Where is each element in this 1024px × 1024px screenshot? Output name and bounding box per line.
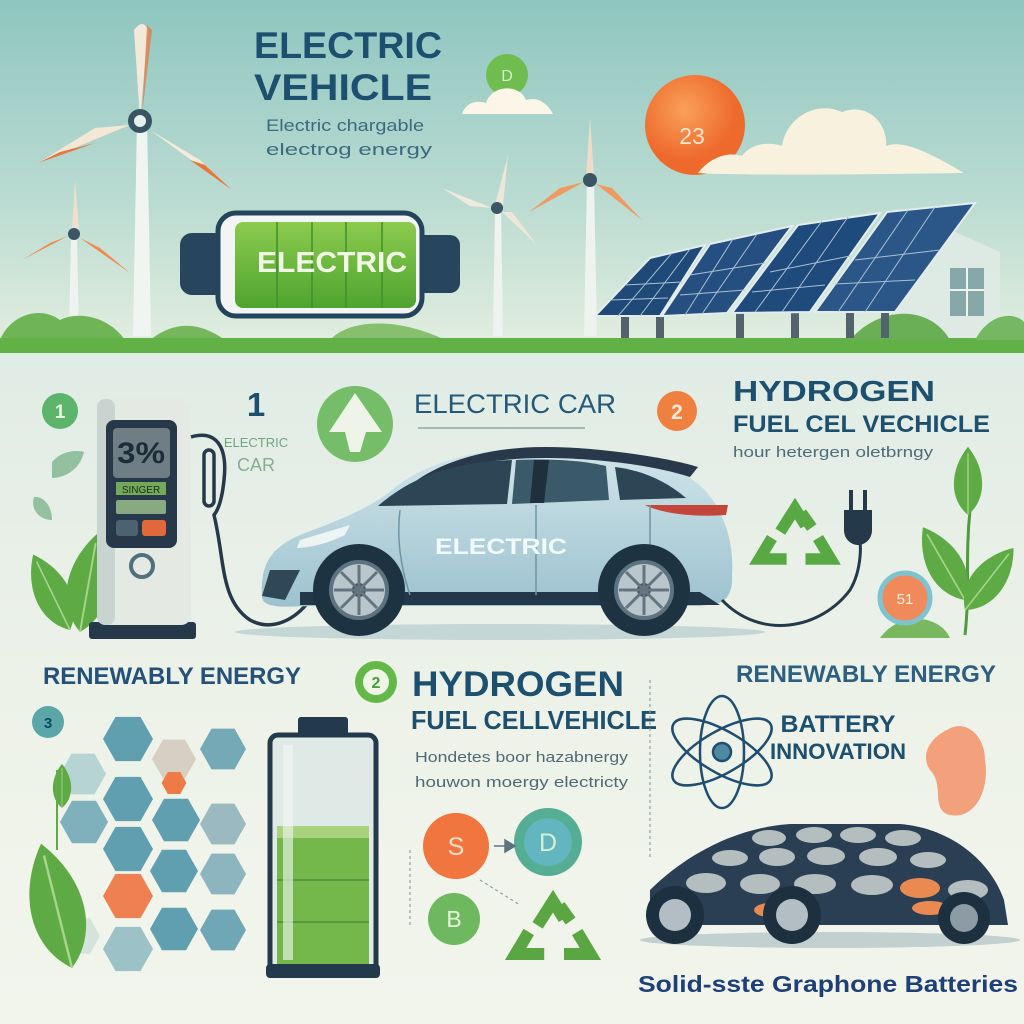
heading: hydrogen fuel cell lower: HYDROGEN <box>412 665 624 704</box>
circle D: D <box>539 829 557 857</box>
subtitle: electrog energy <box>266 140 433 159</box>
icon: atom <box>663 696 781 808</box>
icon: recycling leaf badge <box>317 386 393 462</box>
plug and cable <box>722 490 872 625</box>
icon: small leaves left <box>33 451 84 520</box>
caption: solid-state graphene batteries: Solid-sste Graphone Batteries <box>638 971 1018 997</box>
gauge badge: 51 <box>897 591 913 608</box>
heading: battery innovation: BATTERY <box>780 711 896 738</box>
subtitle: Electric chargable <box>266 116 424 135</box>
icon: sun with cloud <box>645 75 964 175</box>
solar panels <box>595 203 975 338</box>
wind turbines <box>22 24 642 336</box>
subtitle <box>266 116 433 159</box>
hydrogen lower caption <box>415 749 629 791</box>
charging station <box>89 399 196 639</box>
icon: left leaves lower <box>15 764 98 974</box>
electric car <box>235 447 765 640</box>
heading: hydrogen fuel cell lower: FUEL CELLVEHICLE <box>411 705 657 735</box>
title: VEHICLE <box>254 67 432 108</box>
circle S <box>423 813 489 879</box>
title: ELECTRIC <box>254 25 442 66</box>
lower background panel <box>0 352 1024 1024</box>
honeycomb cells <box>60 717 246 971</box>
turbine left small <box>22 180 130 336</box>
step 2 badge lower: 2 <box>372 675 381 692</box>
step 1 badge: 1 <box>55 402 66 423</box>
heading: battery innovation: INNOVATION <box>770 739 906 764</box>
battery label: ELECTRIC <box>257 247 407 279</box>
hydrogen lower caption: houwon moergy electricty <box>415 774 629 791</box>
heading: 1 electric car: CAR <box>237 455 275 475</box>
sky background panel <box>0 0 1024 345</box>
circle B <box>428 893 480 945</box>
charging station: SINGER <box>122 485 160 496</box>
heading: battery innovation <box>770 711 906 764</box>
turbine large <box>38 24 232 336</box>
hydrogen lower caption: Hondetes boor hazabnergy <box>415 749 629 766</box>
icon: recycle lower <box>516 901 590 954</box>
heading: hydrogen fuel cell <box>733 376 990 438</box>
icon: orange blob <box>926 726 986 816</box>
heading: hydrogen fuel cell: FUEL CEL VECHICLE <box>733 411 990 438</box>
heading: 1 electric car: ELECTRIC <box>224 435 288 450</box>
step 3 badge <box>32 706 64 738</box>
charging cable and nozzle <box>191 435 310 625</box>
heading: renewably energy right: RENEWABLY ENERGY <box>736 661 996 688</box>
icon: sun with cloud: 23 <box>679 123 705 149</box>
icon: large leaves left <box>18 530 118 638</box>
ground strip <box>0 313 1024 353</box>
heading: hydrogen fuel cell lower <box>411 665 657 735</box>
step 1 badge <box>42 393 78 429</box>
step 2 badge <box>657 391 697 431</box>
circle B: B <box>446 906 462 932</box>
step 2 badge: 2 <box>671 401 683 424</box>
heading: 1 electric car <box>224 386 288 475</box>
step 3 badge: 3 <box>44 715 52 732</box>
charging station: 3% <box>117 437 165 470</box>
battery pack car <box>640 824 1020 948</box>
battery: electric <box>180 213 460 316</box>
heading: 1 electric car: 1 <box>247 386 265 423</box>
heading: hydrogen fuel cell: HYDROGEN <box>733 376 935 408</box>
turbine middle <box>442 155 536 336</box>
title <box>254 25 442 108</box>
icon: right plant <box>880 447 1024 638</box>
icon: green circle with cloud: D <box>501 68 513 85</box>
connector line <box>410 680 650 925</box>
icon: recycle symbol <box>759 509 831 559</box>
car label: ELECTRIC <box>435 534 567 559</box>
circle S: S <box>448 833 464 861</box>
house <box>850 225 1024 340</box>
step 2 badge lower <box>355 661 397 703</box>
icon: green circle with cloud <box>462 54 553 114</box>
gauge badge <box>880 573 930 623</box>
heading: renewably energy left: RENEWABLY ENERGY <box>43 663 301 690</box>
large battery <box>266 717 380 978</box>
arrow between circles <box>494 840 515 852</box>
heading: electric car: ELECTRIC CAR <box>414 389 616 419</box>
hydrogen caption: hour hetergen oletbrngy <box>733 444 934 461</box>
circle D <box>514 808 582 876</box>
turbine right <box>529 118 642 336</box>
